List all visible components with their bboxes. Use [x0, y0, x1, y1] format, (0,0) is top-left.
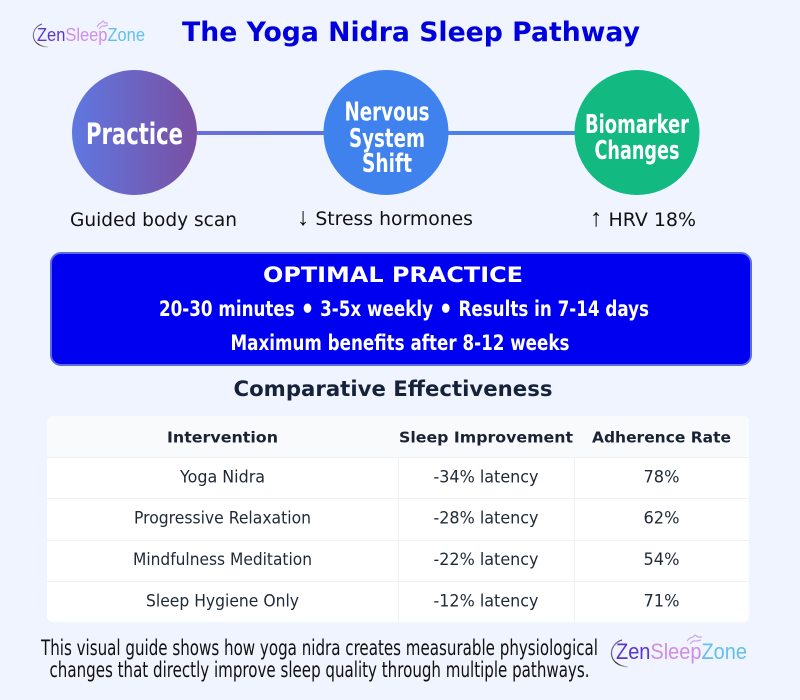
- table header: [167, 428, 731, 446]
- logo: top left: ZenSleepZone: [37, 24, 145, 45]
- step: biomarker changes: Changes: [594, 136, 680, 166]
- banner: optimal practice: [51, 253, 751, 365]
- row: sleep hygiene only: 71%: [644, 592, 680, 610]
- banner: optimal practice: 3-5x weekly: [314, 297, 439, 321]
- row: mindfulness meditation: Mindfulness Meditation: [133, 550, 312, 569]
- step: biomarker changes: [574, 70, 700, 195]
- banner: optimal practice: Maximum benefits after 8-12 weeks: [230, 331, 570, 355]
- row: sleep hygiene only: Sleep Hygiene Only: [146, 592, 299, 610]
- step: nervous system shift: Nervous: [344, 98, 430, 128]
- row: mindfulness meditation: -22% latency: [434, 550, 539, 569]
- step: practice: Practice: [86, 117, 183, 151]
- label: stress hormones: ↓ Stress hormones: [297, 203, 473, 231]
- step: nervous system shift: [324, 70, 448, 195]
- row: sleep hygiene only: [146, 592, 680, 610]
- banner: optimal practice: Results in 7-14 days: [453, 297, 649, 321]
- heading: comparative effectiveness: Comparative Effectiveness: [234, 377, 552, 402]
- label: guided body scan: Guided body scan: [70, 209, 237, 231]
- row: progressive relaxation: -28% latency: [434, 508, 539, 528]
- title: The Yoga Nidra Sleep Pathway: [182, 17, 640, 48]
- footer text: This visual guide shows how yoga nidra creates measurable physiological: [40, 636, 598, 660]
- table header: Adherence Rate: [592, 428, 731, 446]
- row: progressive relaxation: Progressive Relaxation: [134, 508, 311, 528]
- row: yoga nidra: Yoga Nidra: [179, 468, 265, 486]
- row: progressive relaxation: [134, 508, 680, 528]
- footer text: changes that directly improve sleep quality through multiple pathways.: [50, 658, 590, 682]
- banner: optimal practice: •: [301, 294, 314, 325]
- row: yoga nidra: -34% latency: [434, 468, 539, 486]
- connector: nervous system to biomarker: [448, 131, 575, 135]
- banner: optimal practice: 20-30 minutes: [159, 297, 329, 321]
- step: nervous system shift: System: [349, 124, 425, 154]
- row: sleep hygiene only: -12% latency: [434, 592, 539, 610]
- row: yoga nidra: 78%: [644, 468, 680, 486]
- row: progressive relaxation: 62%: [644, 508, 680, 528]
- connector: practice to nervous system: [197, 131, 324, 135]
- banner: optimal practice: OPTIMAL PRACTICE: [263, 263, 523, 287]
- table: comparison: [47, 416, 749, 622]
- row: yoga nidra: [179, 468, 680, 486]
- logo: bottom right: ZenSleepZone: [616, 639, 747, 664]
- table header: Intervention: [167, 428, 278, 446]
- step: nervous system shift: Shift: [362, 149, 412, 179]
- banner: optimal practice: •: [439, 294, 453, 325]
- label: HRV: ↑ HRV 18%: [590, 204, 696, 232]
- row: mindfulness meditation: 54%: [644, 550, 680, 569]
- row: mindfulness meditation: [133, 550, 680, 569]
- step: biomarker changes: Biomarker: [585, 110, 689, 140]
- table header: Sleep Improvement: [399, 428, 574, 446]
- footer text: [40, 636, 598, 682]
- step: practice: [72, 70, 197, 195]
